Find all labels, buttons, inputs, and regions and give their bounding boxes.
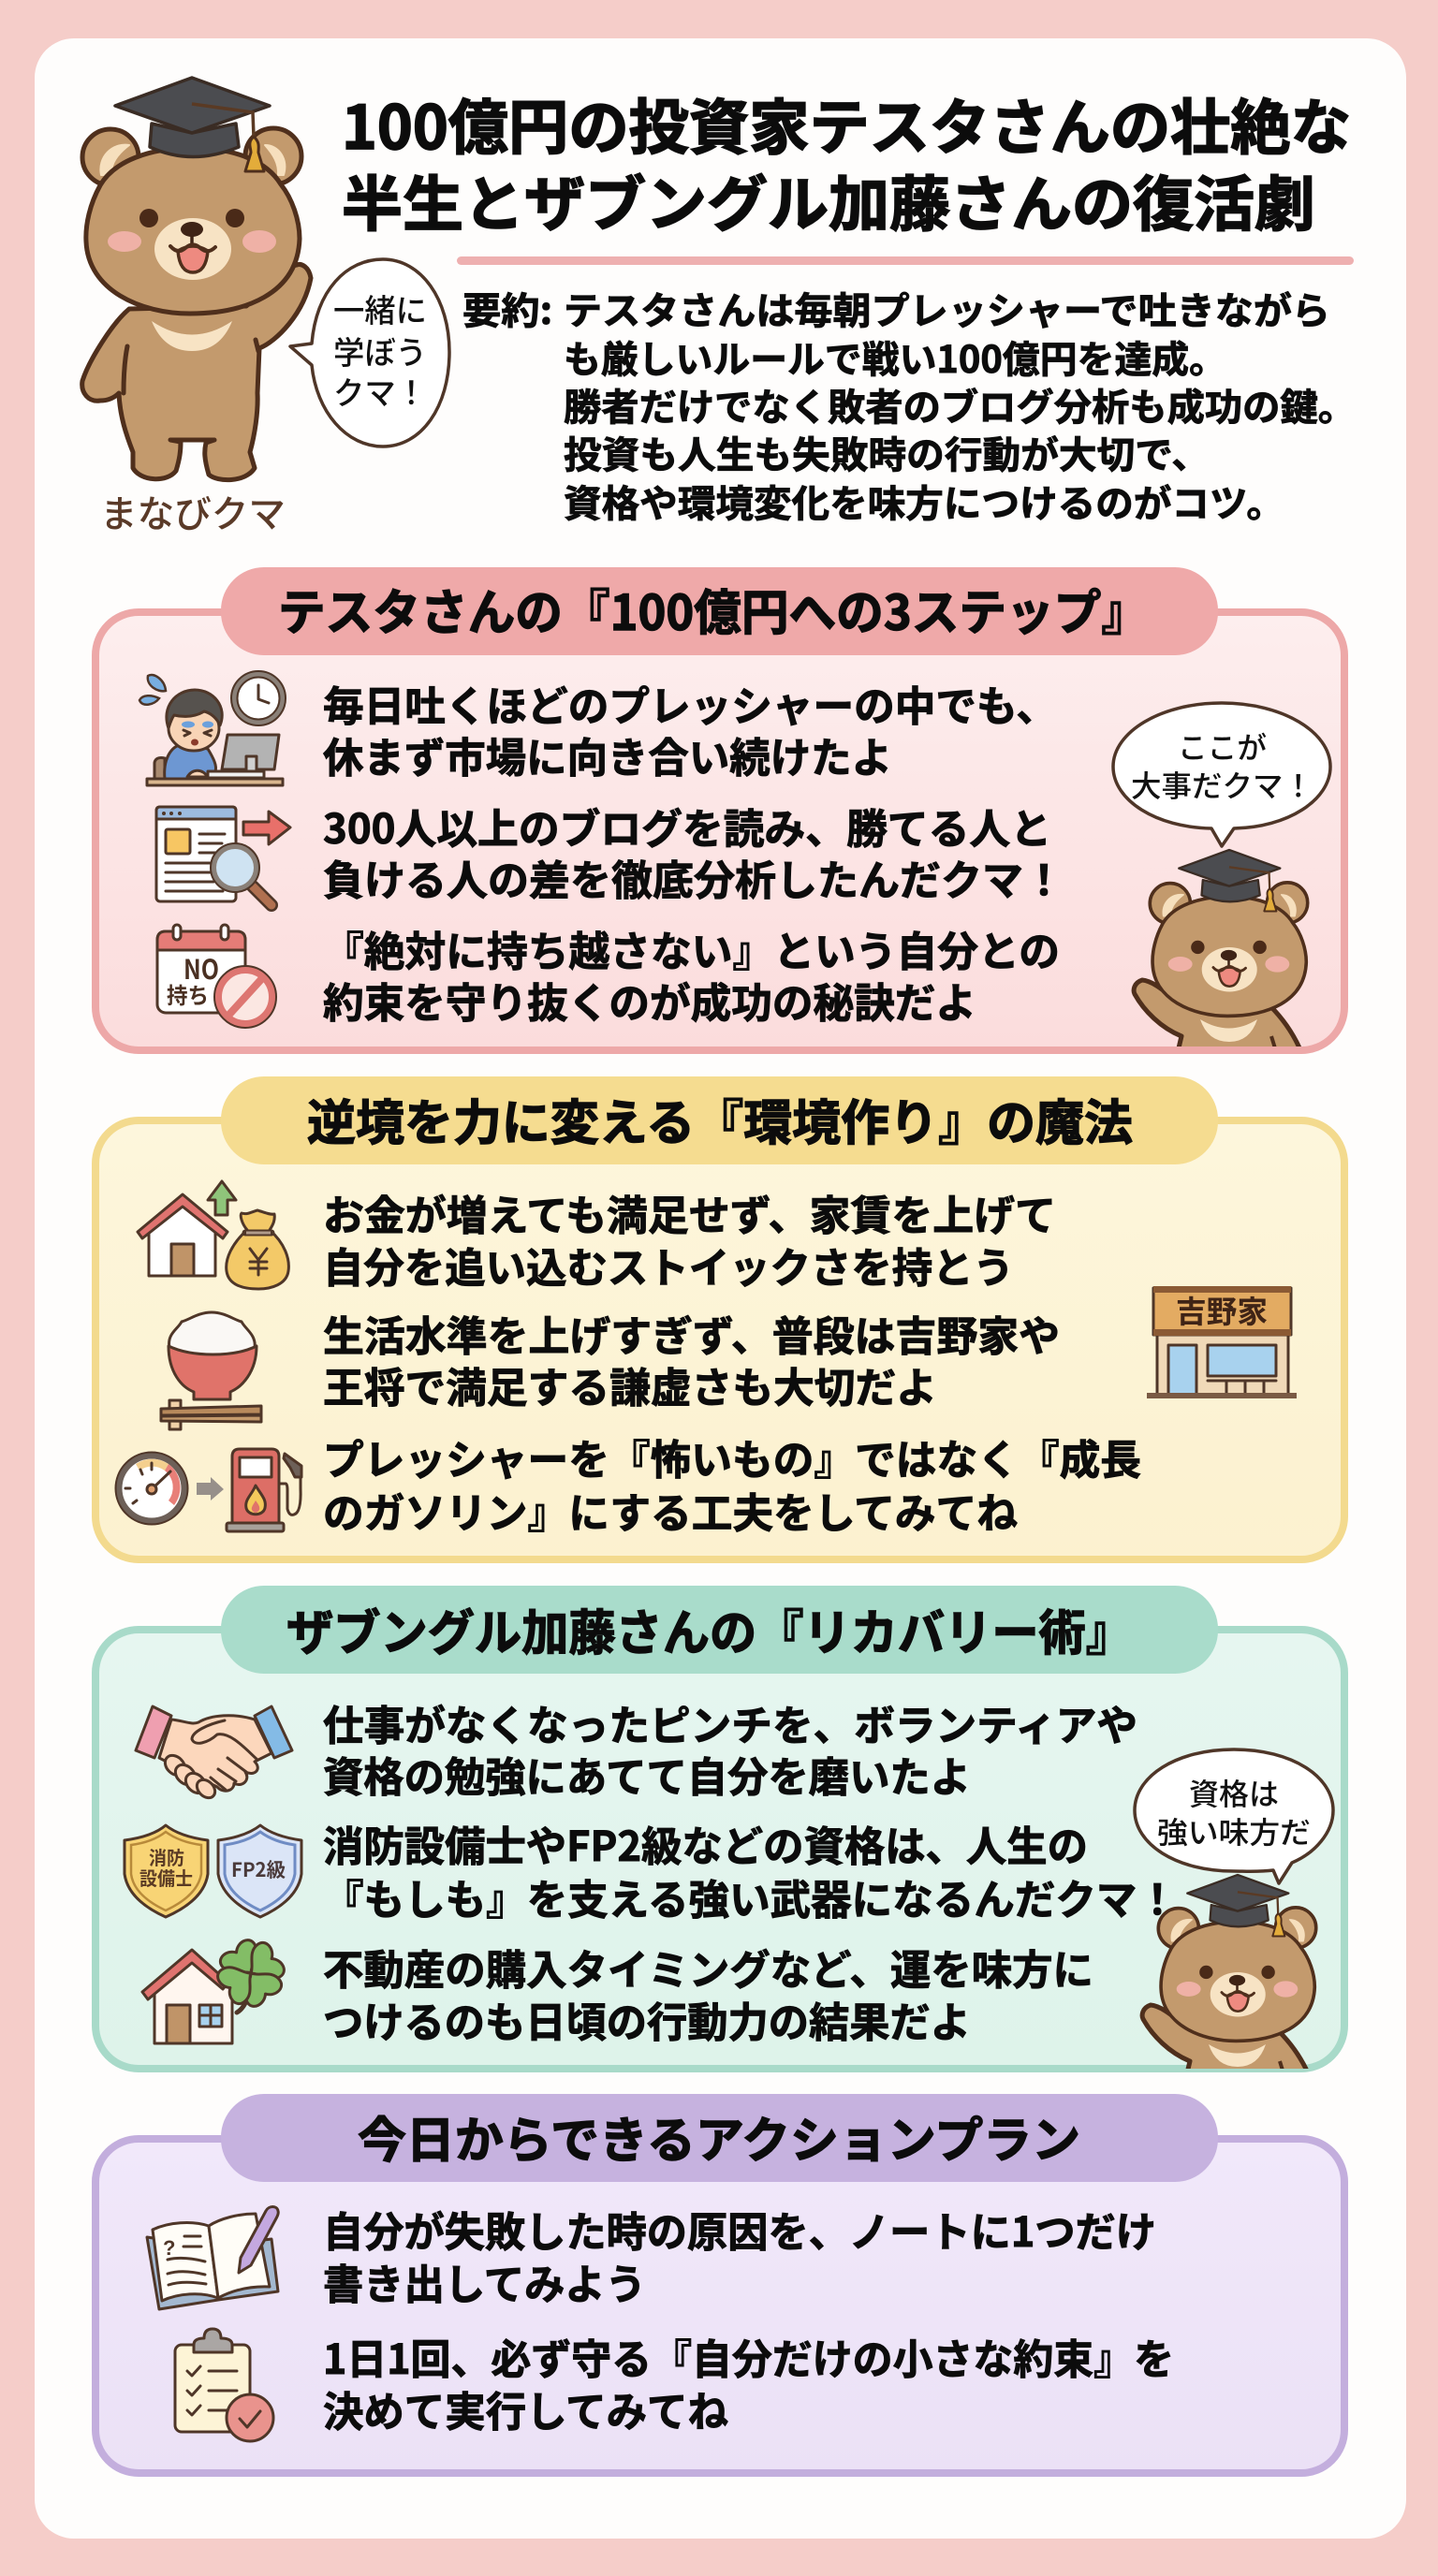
bear mascot waving — [1142, 1875, 1316, 2077]
icon: notebook and pencil — [147, 2207, 278, 2309]
panel: environment magic — [95, 1076, 1344, 1559]
environment text 2: 王将で満足する謙虚さも大切だよ — [323, 1354, 937, 1414]
panel heading: テスタさんの『100億円への3ステップ』 — [278, 574, 1149, 644]
summary text: 勝者だけでなく敗者のブログ分析も成功の鍵。 — [564, 377, 1356, 432]
title: 100億円の投資家テスタさんの壮絶な — [342, 80, 1351, 167]
step text 2: 300人以上のブログを読み、勝てる人と — [323, 796, 1051, 856]
icon: qualification shields: 設備士 — [139, 1864, 193, 1891]
panel body — [95, 1120, 1344, 1559]
panel: Kato recovery — [95, 1586, 1344, 2077]
panel body — [95, 2139, 1344, 2473]
title divider — [457, 256, 1354, 265]
environment text 3 — [323, 1427, 1141, 1540]
speech bubble: 一緒に学ぼうクマ: 一緒に — [333, 285, 427, 331]
panel heading — [221, 1076, 1218, 1164]
summary text: テスタさんは毎朝プレッシャーで吐きながら — [564, 281, 1330, 335]
panel heading: 逆境を力に変える『環境作り』の魔法 — [307, 1084, 1133, 1154]
recovery text 3: つけるのも日頃の行動力の結果だよ — [323, 1989, 971, 2049]
mascot name label: まなびクマ — [100, 484, 286, 538]
recovery text 3: 不動産の購入タイミングなど、運を味方に — [323, 1937, 1093, 1997]
panel heading — [221, 2094, 1218, 2182]
speech bubble: 資格は強い味方だ — [1135, 1749, 1333, 1883]
environment text 3: のガソリン』にする工夫をしてみてね — [323, 1480, 1018, 1540]
step text 3 — [323, 918, 1060, 1030]
summary text — [462, 281, 1356, 528]
speech bubble: 資格は強い味方だ: 強い味方だ — [1157, 1809, 1311, 1852]
speech bubble: ここが大事だクマ — [1113, 703, 1330, 846]
summary text: 資格や環境変化を味方につけるのがコツ。 — [564, 474, 1284, 528]
icon: Yoshinoya store: 吉野家 — [1176, 1287, 1268, 1332]
main bear mascot — [82, 78, 311, 480]
speech bubble: ここが大事だクマ: 大事だクマ！ — [1131, 763, 1313, 806]
bear mascot waving — [1134, 850, 1308, 1052]
environment text 3: プレッシャーを『怖いもの』ではなく『成長 — [323, 1427, 1141, 1486]
icon: Yoshinoya store — [1147, 1286, 1297, 1398]
icon: notebook and pencil: ? — [163, 2236, 175, 2260]
panel body — [95, 1630, 1344, 2069]
icon: rice bowl with chopsticks — [161, 1312, 261, 1429]
step text 2 — [323, 796, 1064, 907]
panel heading: 今日からできるアクションプラン — [358, 2101, 1080, 2172]
action text 1 — [323, 2199, 1156, 2311]
icon: house with rising rent and money bag — [138, 1181, 288, 1289]
environment text 2 — [323, 1303, 1060, 1414]
icon: checklist clipboard — [175, 2329, 273, 2441]
step text 1: 休まず市場に向き合い続けたよ — [323, 724, 892, 784]
step text 1: 毎日吐くほどのプレッシャーの中でも、 — [323, 673, 1057, 733]
summary text: 投資も人生も失敗時の行動が大切で、 — [564, 425, 1210, 479]
speech bubble: ここが大事だクマ: ここが — [1178, 724, 1267, 768]
icon: qualification shields — [125, 1825, 301, 1917]
environment text 1: 自分を追い込むストイックさを持とう — [323, 1235, 1014, 1295]
speech bubble: 一緒に学ぼうクマ: クマ！ — [333, 368, 427, 414]
title: 半生とザブングル加藤さんの復活劇 — [342, 157, 1315, 243]
action text 1: 書き出してみよう — [323, 2251, 646, 2311]
title — [342, 80, 1351, 243]
speech bubble: 一緒に学ぼうクマ — [290, 259, 449, 446]
panel body — [95, 612, 1344, 1050]
recovery text 1 — [323, 1692, 1137, 1804]
icon: stressed person at computer with clock — [139, 671, 286, 785]
environment text 1: お金が増えても満足せず、家賃を上げて — [323, 1182, 1056, 1242]
recovery text 3 — [323, 1937, 1093, 2049]
recovery text 2: 『もしも』を支える強い武器になるんだクマ！ — [323, 1866, 1178, 1926]
panel heading: ザブングル加藤さんの『リカバリー術』 — [286, 1594, 1133, 1664]
step text 1 — [323, 673, 1057, 784]
step text 3: 『絶対に持ち越さない』という自分との — [323, 918, 1060, 978]
icon: blog page with magnifier — [156, 807, 290, 905]
icon: pressure gauge turning to fuel pump — [116, 1449, 301, 1531]
icon: qualification shields: FP2級 — [231, 1855, 286, 1883]
summary text: も厳しいルールで戦い100億円を達成。 — [564, 329, 1226, 384]
recovery text 2 — [323, 1813, 1178, 1926]
recovery text 1: 資格の勉強にあてて自分を磨いたよ — [323, 1744, 971, 1804]
icon: no carry-over calendar: 持ち — [167, 977, 209, 1010]
speech bubble: 資格は強い味方だ: 資格は — [1189, 1771, 1279, 1814]
panel: Testa 3 steps — [95, 567, 1344, 1052]
recovery text 2: 消防設備士やFP2級などの資格は、人生の — [323, 1813, 1088, 1873]
icon: qualification shields: 消防 — [149, 1843, 184, 1870]
icon: house with four-leaf clover — [142, 1937, 287, 2043]
icon: no carry-over calendar — [157, 925, 276, 1028]
icon: handshake — [136, 1706, 292, 1801]
environment text 2: 生活水準を上げすぎず、普段は吉野家や — [323, 1303, 1060, 1363]
environment text 1 — [323, 1182, 1056, 1295]
action text 2: 決めて実行してみてね — [323, 2378, 728, 2438]
panel: action plan — [95, 2094, 1344, 2473]
summary text: 要約: — [462, 281, 552, 335]
step text 3: 約束を守り抜くのが成功の秘訣だよ — [323, 970, 976, 1030]
action text 2 — [323, 2326, 1174, 2438]
icon: no carry-over calendar: NO — [183, 948, 219, 988]
recovery text 1: 仕事がなくなったピンチを、ボランティアや — [323, 1692, 1137, 1752]
speech bubble: 一緒に学ぼうクマ: 学ぼう — [333, 328, 427, 373]
action text 1: 自分が失敗した時の原因を、ノートに1つだけ — [323, 2199, 1156, 2259]
step text 2: 負ける人の差を徹底分析したんだクマ！ — [323, 847, 1064, 907]
action text 2: 1日1回、必ず守る『自分だけの小さな約束』を — [323, 2326, 1174, 2386]
